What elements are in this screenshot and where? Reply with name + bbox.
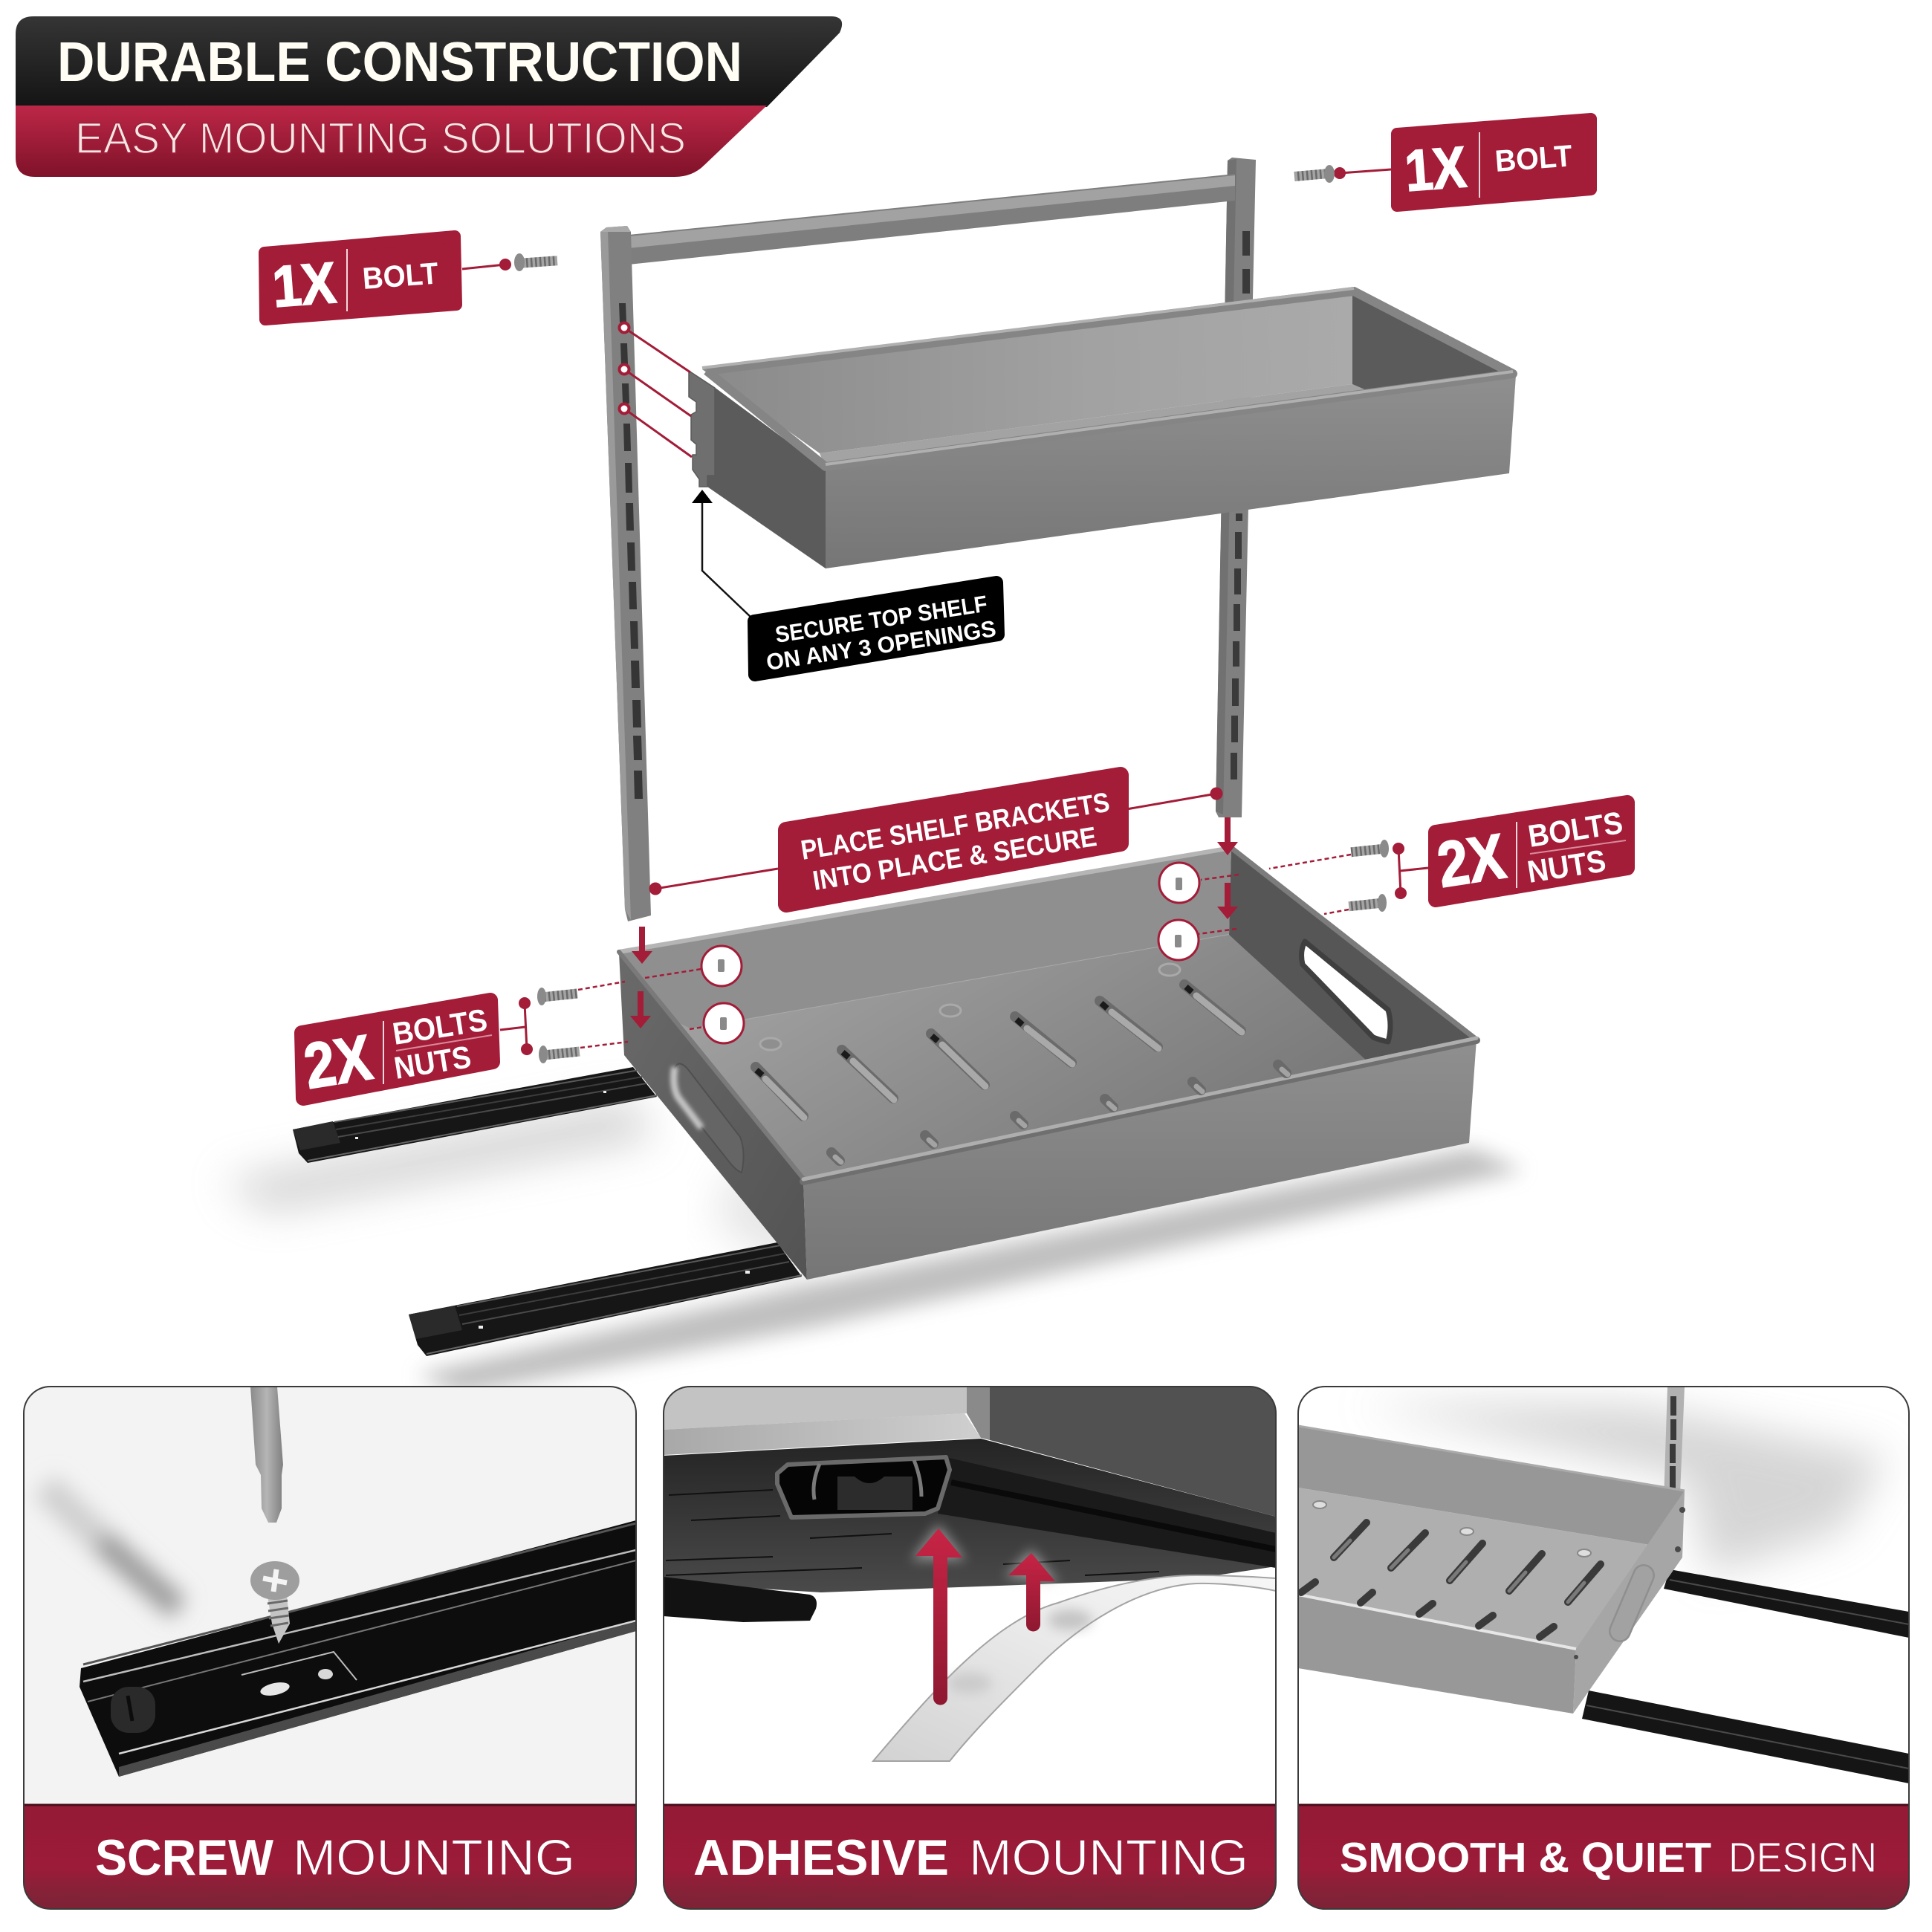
2X bolts nuts tag left: BOLTS <box>390 1002 490 1051</box>
caption <box>1340 1834 1877 1881</box>
screwdriver <box>250 1387 283 1523</box>
right upright post <box>1216 158 1256 817</box>
tray short slots <box>832 1065 1288 1162</box>
right post slots <box>1231 231 1250 779</box>
panel border 3 <box>1298 1387 1909 1909</box>
underside slot marks <box>666 1490 1159 1575</box>
dashed guide lines <box>578 855 1351 1048</box>
tray back wall <box>619 848 1231 1029</box>
header red band <box>16 106 767 177</box>
tray back wall <box>1298 1426 1685 1545</box>
post <box>1664 1387 1685 1501</box>
caption: SCREW <box>95 1829 274 1886</box>
back rail <box>1664 1569 1909 1638</box>
shelf floor strip <box>820 384 1375 468</box>
drawer underside <box>664 1439 1276 1592</box>
top shelf <box>689 288 1516 568</box>
caption <box>97 1840 571 1876</box>
caption: DESIGN <box>1728 1834 1877 1881</box>
header dark band <box>16 16 842 107</box>
1X bolt tag left: BOLT <box>361 256 439 296</box>
1X bolt tag left <box>265 236 511 320</box>
shelf rims <box>707 291 1513 467</box>
shelf brackets <box>689 371 715 487</box>
arrow: right post down <box>1217 817 1238 855</box>
tray floor screws <box>760 964 1180 1050</box>
header subtitle: EASY MOUNTING SOLUTIONS <box>75 114 686 163</box>
nut detail circles <box>701 863 1199 1043</box>
tray front panel <box>803 1040 1476 1280</box>
tray floor <box>1298 1488 1650 1651</box>
side screws <box>1574 1507 1685 1659</box>
shelf front panel <box>826 375 1516 568</box>
panel: smooth and quiet design <box>1298 1387 1909 1909</box>
left upright post <box>600 226 651 921</box>
slide rail: rear <box>293 1067 657 1163</box>
2X bolts nuts tag right: 2X <box>1433 820 1510 901</box>
2X bolts nuts tag left: NUTS <box>392 1039 473 1086</box>
lower tray <box>619 848 1476 1280</box>
callout: secure top shelf <box>754 583 998 675</box>
2X bolts nuts tag right: BOLTS <box>1526 805 1625 854</box>
caption: SMOOTH & QUIET <box>1340 1834 1711 1881</box>
tray front <box>1298 1595 1576 1714</box>
shelf inner right wall <box>1352 293 1508 394</box>
2X bolts nuts tag right <box>1393 803 1627 901</box>
shelf left side <box>705 386 826 568</box>
rail mounting plate <box>242 1652 357 1680</box>
caption: MOUNTING <box>293 1829 575 1886</box>
screw <box>250 1561 299 1644</box>
tray left handle <box>673 1063 744 1173</box>
callout: place shelf brackets: PLACE SHELF BRACKETS <box>799 787 1112 866</box>
bolt right <box>1294 165 1335 183</box>
silver tray top <box>664 1387 967 1430</box>
1X bolt tag right: 1X <box>1403 134 1468 204</box>
black arrow to bracket <box>692 490 752 618</box>
front rail <box>1582 1690 1909 1783</box>
caption: MOUNTING <box>969 1829 1248 1886</box>
callout: place shelf brackets: INTO PLACE & SECURE <box>811 821 1098 896</box>
arrow: left hole down <box>630 991 651 1028</box>
2X bolts nuts tag left: 2X <box>299 1022 377 1103</box>
stub rail <box>664 1577 817 1622</box>
pin connectors to shelf bracket <box>620 322 692 457</box>
caption <box>693 1829 1248 1886</box>
panel border 2 <box>664 1387 1276 1909</box>
bolt left <box>514 253 557 271</box>
caption bar <box>24 1805 636 1909</box>
caption bar <box>1298 1805 1909 1909</box>
panel: adhesive mounting <box>664 1387 1276 1909</box>
caption: ADHESIVE <box>693 1829 949 1886</box>
plastic clip <box>111 1687 155 1733</box>
tray right inner wall <box>1229 848 1476 1063</box>
tray floor <box>669 935 1375 1184</box>
arrow: right hole down <box>1217 883 1238 919</box>
header banner <box>16 16 842 177</box>
left post slots <box>619 303 643 799</box>
panel border 1 <box>24 1387 636 1909</box>
floor shadows <box>223 1100 1523 1393</box>
insertion arrows <box>630 817 1238 1028</box>
callout: secure top shelf: ON ANY 3 OPENINGS <box>765 615 998 675</box>
callout: place shelf brackets <box>649 775 1223 904</box>
tray side <box>1573 1491 1685 1714</box>
arrow: left post down <box>632 927 652 964</box>
1X bolt tag right: BOLT <box>1494 138 1573 178</box>
rail cross-section <box>777 1457 950 1517</box>
adhesive tape <box>873 1575 1276 1761</box>
1X bolt tag left: 1X <box>270 250 338 320</box>
1X bolt tag right <box>1334 119 1591 206</box>
2X bolts nuts tag right: NUTS <box>1525 843 1608 889</box>
arrow: small up <box>1008 1553 1055 1632</box>
bolts left pair <box>537 988 580 1063</box>
drawer rail <box>80 1520 636 1777</box>
tray rims <box>619 848 1231 952</box>
soft shadow <box>45 1486 178 1609</box>
tray right handle opening <box>1302 941 1390 1042</box>
header title: DURABLE CONSTRUCTION <box>57 30 742 93</box>
tray screws <box>1313 1501 1591 1557</box>
tray left outer panel <box>619 953 807 1280</box>
2X bolts nuts tag left <box>299 997 533 1103</box>
caption bar <box>664 1805 1276 1909</box>
slide rail: front <box>409 1242 802 1356</box>
tray long slots <box>1334 1523 1601 1602</box>
soft shadow <box>1360 1404 1887 1575</box>
panel: screw mounting <box>24 1387 636 1909</box>
arrow glow <box>911 1523 1060 1584</box>
tray long slots <box>756 985 1242 1118</box>
arrow: large up <box>915 1529 962 1705</box>
rail body <box>938 1457 1276 1568</box>
bolts right pair <box>1348 840 1389 912</box>
callout: secure top shelf: SECURE TOP SHELF <box>774 591 989 648</box>
shelf back wall <box>702 288 1354 453</box>
top rail bar <box>629 174 1235 265</box>
tray short slots <box>1301 1582 1554 1637</box>
